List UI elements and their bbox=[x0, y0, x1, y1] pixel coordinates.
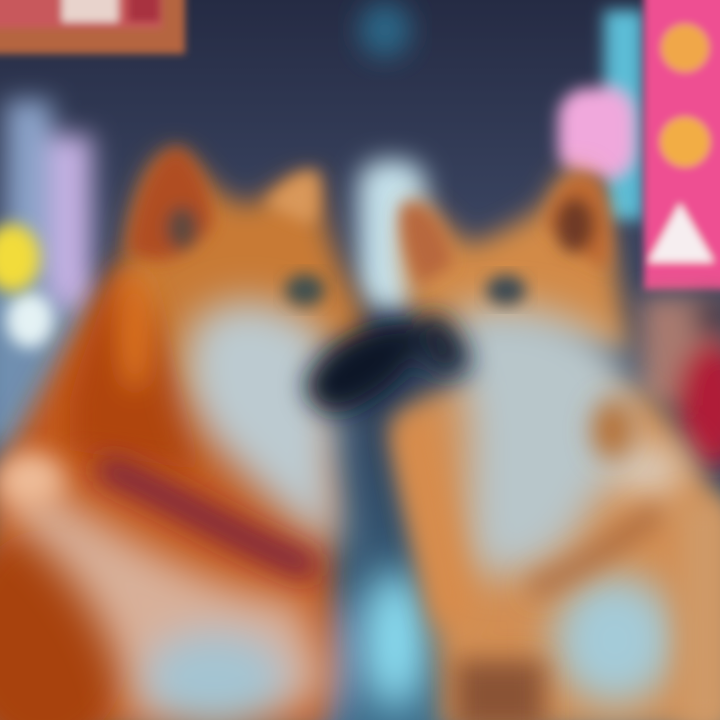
dog: left shiba bbox=[0, 148, 365, 720]
glow: top centre blue light bbox=[359, 2, 411, 58]
sign: right pink neon column bbox=[558, 0, 720, 290]
building: left lavender towers bbox=[0, 100, 100, 450]
right dog eye bbox=[486, 275, 526, 305]
dog: right shiba bbox=[395, 169, 720, 720]
right dog body bbox=[395, 371, 720, 720]
left dog body bbox=[0, 260, 335, 720]
light: white lamp bbox=[6, 292, 54, 348]
dogs: touching noses bbox=[305, 313, 470, 413]
right dog cheek shadow and collar bbox=[410, 400, 720, 720]
glow: bottom centre cyan puddle bbox=[309, 570, 429, 720]
left dog ears bbox=[128, 148, 319, 260]
right dog white face and chest bbox=[445, 305, 686, 706]
building: centre white tower bbox=[358, 160, 426, 310]
right dog head bbox=[403, 169, 630, 350]
left dog eye bbox=[285, 274, 325, 306]
left dog white face and chest bbox=[10, 301, 345, 720]
right dog ears bbox=[401, 175, 610, 285]
left dog shoulder highlight bbox=[0, 452, 64, 508]
left dog deep orange neck fur bbox=[0, 270, 200, 720]
sign: top-left orange board bbox=[0, 0, 185, 54]
glow: right side red lantern bbox=[640, 295, 720, 469]
left dog head bbox=[125, 150, 365, 400]
left dog mouth bbox=[110, 470, 305, 565]
light: yellow lamp bbox=[0, 224, 40, 292]
